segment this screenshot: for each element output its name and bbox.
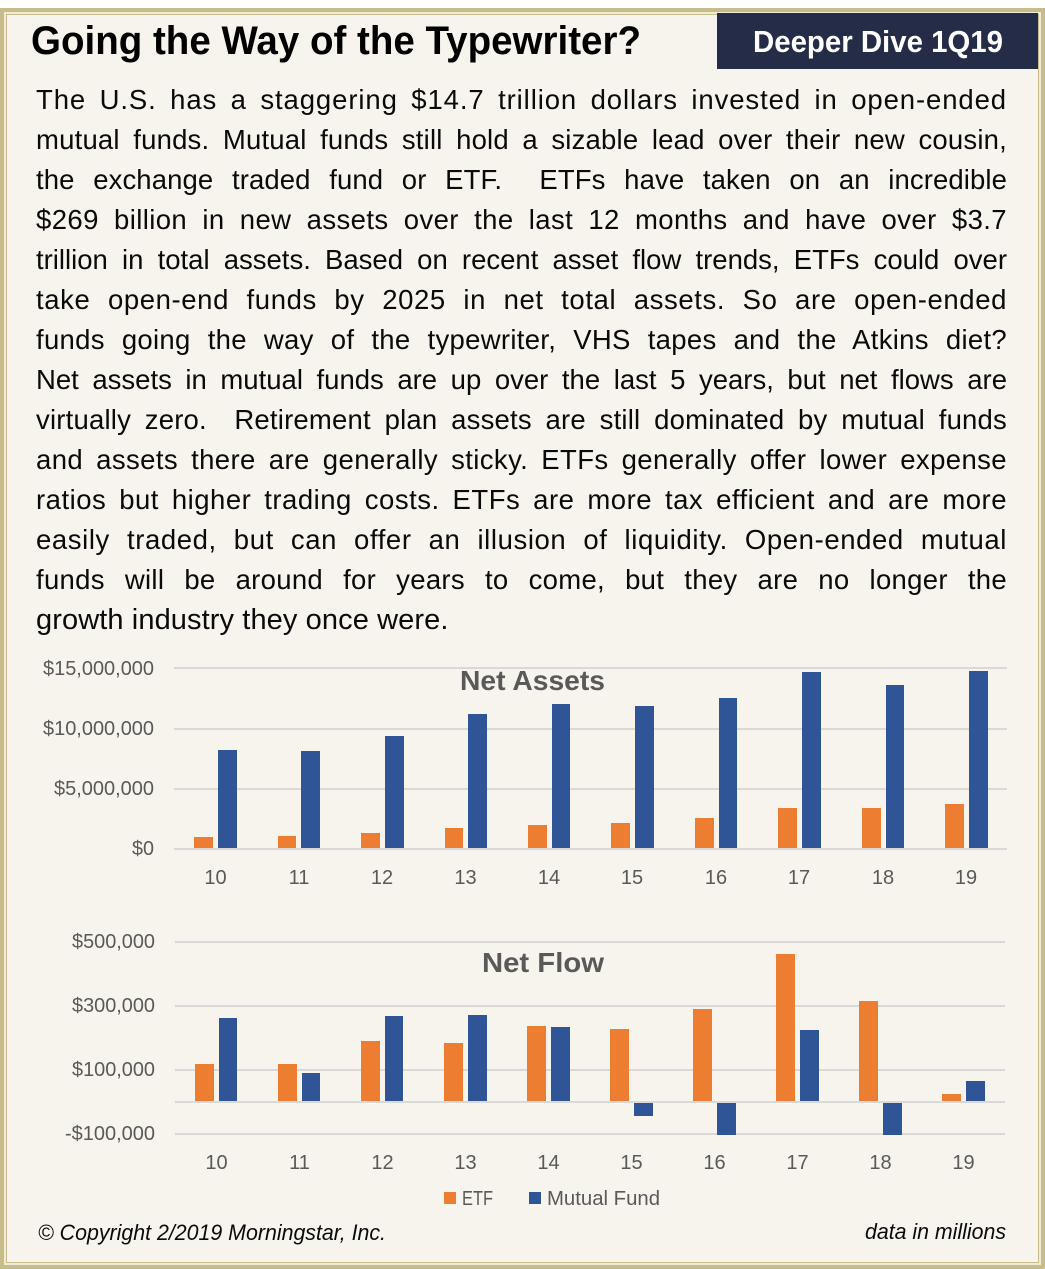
badge: Deeper Dive background [717, 13, 1038, 69]
ETF bars [195, 954, 961, 1101]
x axis labels: 14 [538, 867, 560, 889]
chart title: Net Assets: Net Assets [460, 665, 605, 696]
y axis labels: $5,000,000 [54, 778, 154, 800]
chart title: Net Flow: Net Flow [482, 947, 604, 978]
x axis labels: 12 [371, 867, 393, 889]
body text: growth industry they once were. [36, 604, 449, 636]
x axis labels: 15 [621, 867, 643, 889]
legend: ETF [462, 1188, 493, 1210]
bar chart: Net Assets [43, 658, 1007, 889]
x axis labels: 16 [703, 1152, 726, 1174]
Mutual Fund bars [218, 671, 988, 848]
legend: Mutual Fund [547, 1188, 660, 1210]
x axis labels: 19 [952, 1152, 975, 1174]
ETF bars [194, 804, 964, 848]
copyright note: © Copyright 2/2019 Morningstar, Inc. [38, 1220, 386, 1245]
y axis labels: $300,000 [72, 995, 155, 1017]
badge label: Deeper Dive 1Q19 [753, 24, 1003, 59]
x axis labels: 11 [289, 867, 309, 889]
y axis labels: -$100,000 [65, 1123, 155, 1145]
body text: $269 billion in new assets over the last 12 months and have over $3.7 [36, 204, 1007, 235]
body text: funds going the way of the typewriter, VHS tapes and the Atkins diet? [36, 324, 1007, 355]
x axis labels [204, 867, 977, 889]
x axis labels: 15 [620, 1152, 643, 1174]
x axis labels: 13 [454, 1152, 477, 1174]
y axis labels: $100,000 [72, 1059, 155, 1081]
body text: and assets there are generally sticky. ETFs generally offer lower expense [36, 444, 1007, 475]
x axis labels: 17 [786, 1152, 809, 1174]
y axis labels [65, 931, 155, 1145]
body text: take open-end funds by 2025 in net total assets. So are open-ended [36, 284, 1007, 315]
x axis labels: 19 [955, 867, 977, 889]
bar chart: Net Flow [65, 931, 1005, 1174]
x axis labels: 16 [705, 867, 727, 889]
x axis labels: 14 [537, 1152, 560, 1174]
body text: The U.S. has a staggering $14.7 trillion dollars invested in open-ended [36, 84, 1007, 115]
body text: funds will be around for years to come, but they are no longer the [36, 564, 1007, 595]
data units note: data in millions [865, 1219, 1006, 1244]
x axis labels: 17 [788, 867, 810, 889]
title: Going the Way of the Typewriter? [31, 19, 641, 63]
x axis labels: 13 [454, 867, 477, 889]
x axis labels: 18 [869, 1152, 892, 1174]
body text: ratios but higher trading costs. ETFs are more tax efficient and are more [36, 484, 1007, 515]
x axis labels [205, 1152, 975, 1174]
body text: trillion in total assets. Based on recent asset flow trends, ETFs could over [36, 244, 1007, 275]
body text [36, 84, 1007, 636]
body text: mutual funds. Mutual funds still hold a sizable lead over their new cousin, [36, 124, 1007, 155]
legend [444, 1188, 660, 1210]
x axis labels: 10 [205, 1152, 228, 1174]
body text: the exchange traded fund or ETF. ETFs have taken on an incredible [36, 164, 1007, 195]
x axis labels: 10 [204, 867, 227, 889]
x axis labels: 11 [289, 1152, 310, 1174]
Mutual Fund bars [219, 1015, 985, 1135]
x axis labels: 18 [872, 867, 894, 889]
y axis labels: $0 [132, 838, 154, 860]
y axis labels [43, 658, 154, 860]
y axis labels: $500,000 [72, 931, 155, 953]
y axis labels: $15,000,000 [43, 658, 154, 680]
body text: virtually zero. Retirement plan assets are still dominated by mutual funds [36, 404, 1007, 435]
x axis labels: 12 [371, 1152, 394, 1174]
body text: Net assets in mutual funds are up over the last 5 years, but net flows are [36, 364, 1007, 395]
body text: easily traded, but can offer an illusion of liquidity. Open-ended mutual [36, 524, 1007, 555]
y axis labels: $10,000,000 [43, 718, 154, 740]
